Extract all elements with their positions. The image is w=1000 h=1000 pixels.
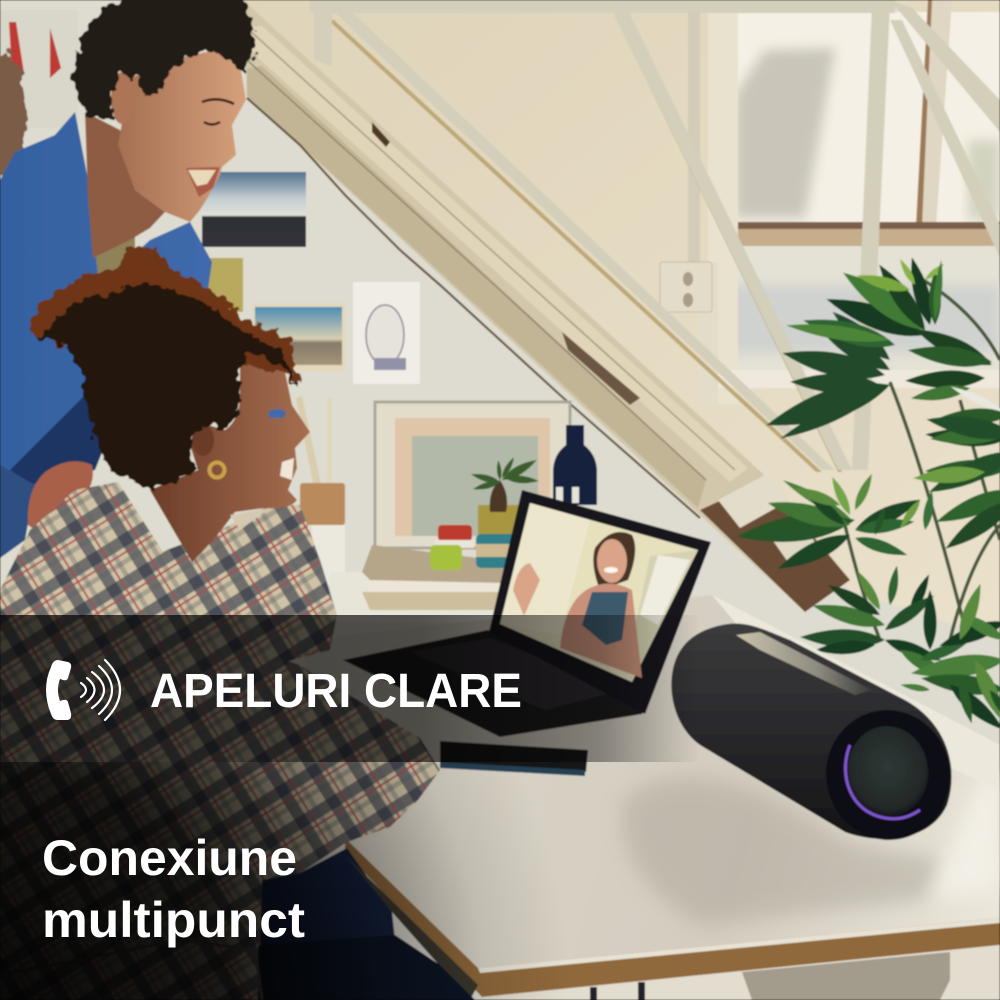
stair railing (310, 0, 1000, 472)
man's ear (111, 72, 133, 124)
stair beam (243, 0, 850, 612)
under-table floor (345, 855, 478, 1000)
speaker body (671, 623, 952, 839)
woman's hair (40, 286, 298, 490)
speaker (671, 623, 958, 848)
speaker shadow on table (623, 778, 940, 925)
speaker end ring (818, 702, 958, 848)
upper frond (762, 255, 946, 445)
woman's curl halo (25, 246, 302, 380)
blue bottle (553, 425, 597, 505)
plant stems (845, 275, 1000, 640)
woman's shirt (0, 482, 440, 1000)
framed picture (375, 402, 570, 548)
icon: phone with sound waves (46, 660, 120, 720)
jacket sleeve cuff (0, 465, 35, 558)
poster and curly hair at top-left (0, 10, 78, 177)
speaker light ring (845, 745, 920, 819)
woman's eye makeup (268, 409, 286, 418)
man's face (118, 50, 246, 222)
lime leaf by the right stem (897, 464, 986, 531)
heading: apeluri clare: APELURI CLARE (150, 665, 522, 718)
person on screen (513, 532, 642, 678)
wall photos (202, 172, 420, 384)
laptop (343, 490, 711, 737)
man's eyebrow and eye (202, 99, 234, 124)
woman's neck and face (150, 354, 310, 562)
upper wall above stairs (243, 0, 1000, 640)
woman's earring (210, 462, 224, 478)
middle frond (734, 472, 924, 577)
bottom-right frond (900, 581, 1000, 736)
jacket shadow panel (10, 395, 105, 485)
title band (0, 615, 1000, 762)
man's hair (74, 0, 255, 118)
woman and man (0, 0, 478, 1000)
wall outlet (660, 262, 712, 312)
speaker top panel (736, 632, 872, 695)
woman's jeans (260, 848, 395, 945)
table (300, 595, 1000, 997)
man's jacket (0, 112, 212, 558)
shelf (330, 572, 530, 622)
phone on table (440, 741, 588, 776)
woman's shirt far shoulder (140, 505, 337, 662)
laptop screen (500, 503, 698, 682)
man's hand (28, 461, 93, 530)
text: conexiune multipunct (42, 830, 305, 948)
woman's collar (230, 508, 270, 530)
text: conexiune multipunct: Conexiune (42, 830, 297, 886)
lower frond (800, 565, 969, 686)
woman's ear (192, 424, 214, 456)
pencil cup and sticks (296, 396, 345, 585)
speaker passive radiator (842, 721, 934, 821)
houseplant (734, 255, 1000, 736)
shade over lower-left area (0, 762, 1000, 1000)
stack of books and tins (362, 525, 520, 610)
man's smile (186, 167, 220, 197)
lower jeans (258, 935, 475, 1000)
laptop keyboard base (343, 630, 652, 737)
floor and plant pot beneath table (470, 945, 1000, 1000)
table edge over plant base (712, 595, 1000, 790)
laptop lid (489, 490, 711, 714)
text: conexiune multipunct: multipunct (42, 892, 305, 948)
man's shirt (95, 232, 135, 292)
man's neck (85, 112, 165, 258)
window (688, 0, 1000, 404)
small potted plant (470, 456, 539, 536)
phone handset (46, 660, 71, 720)
table highlight (930, 770, 1000, 900)
right frond (905, 321, 1000, 556)
woman's smile (280, 458, 294, 480)
sound waves (81, 660, 120, 720)
table front edge (345, 838, 1000, 997)
chair edge (0, 940, 262, 1000)
